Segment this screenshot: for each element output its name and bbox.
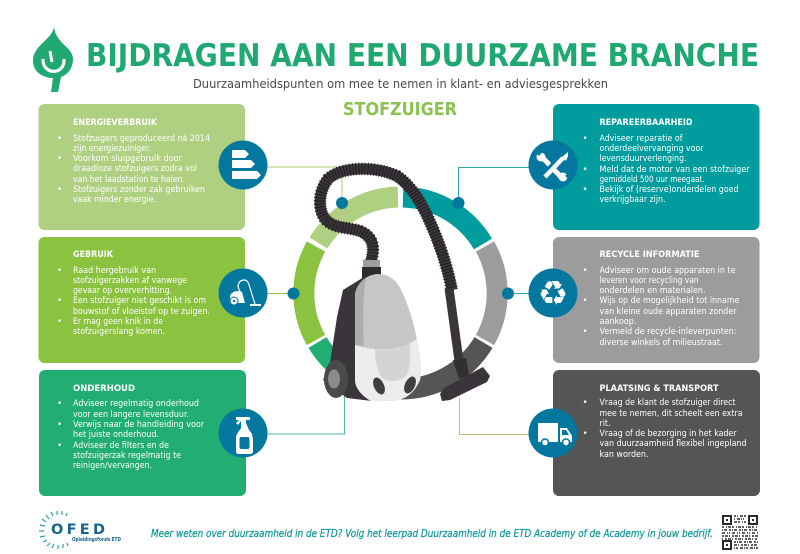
panel: repareerbaarheid: gemiddeld 500 uur meegaat. [600,175,704,185]
subtitle: Duurzaamheidspunten om mee te nemen in klant- en adviesgesprekken [193,77,608,92]
panel: recycle informatie: • [582,266,588,276]
panel: repareerbaarheid: Adviseer reparatie of [600,134,683,144]
panel: repareerbaarheid: REPAREERBAARHEID [600,118,692,128]
panel: energieverbruik: ENERGIEVERBRUIK [73,118,158,128]
panel: onderhoud: het juiste onderhoud. [73,430,159,440]
panel: gebruik: Een stofzuiger niet geschikt is om [73,296,206,306]
panel: onderhoud: Adviseer regelmatig onderhoud [73,399,199,409]
icon: leaf logo [33,27,73,92]
diagram: segmented ring [304,197,497,389]
icon: tools [528,140,578,190]
panel: recycle informatie: leveren voor recycling van [600,276,698,286]
panel: plaatsing en transport: mee te nemen, dit scheelt een extra [600,409,742,419]
logo: OFED: OFED [51,522,105,538]
panel: onderhoud [39,370,246,496]
panel: energieverbruik: Voorkom sluipgebruik door [73,154,182,164]
panel: repareerbaarheid [553,104,760,230]
panel: gebruik: stofzuigerslang komen. [73,327,165,337]
connector: onderhoud [262,396,344,434]
heading: stofzuiger: STOFZUIGER [343,100,457,120]
panel: energieverbruik: Stofzuigers geproduceerd ná 2014 [73,134,210,144]
panel: onderhoud: reinigen/vervangen. [73,461,152,471]
panel: gebruik: Er mag geen knik in de [73,317,163,327]
panel: energieverbruik: Stofzuigers zonder zak gebruiken [73,185,205,195]
panel: onderhoud: Verwijs naar de handleiding voor [73,420,204,430]
panel: onderhoud: voor een langere levensduur. [73,410,189,420]
icon: truck [528,408,578,458]
panel: recycle informatie: van kleine oude apparaten zonder [600,307,737,317]
panel: recycle informatie: Adviseer om oude apparaten in te [600,266,736,276]
panel: plaatsing en transport: van duurzaamheid flexibel ingepland [600,439,746,449]
icon: energy label [218,140,268,190]
panel: gebruik: GEBRUIK [73,250,114,260]
connector: plaatsing [460,398,535,434]
panel: plaatsing en transport: Vraag of de bezorging in het kader [600,429,737,439]
panel: recycle informatie: RECYCLE INFORMATIE [600,250,700,260]
logo: OFED: Opleidingsfonds ETD [72,537,122,543]
panel: energieverbruik [38,104,245,230]
footer call to action: Meer weten over duurzaamheid in de ETD? Volg het leerpad Duurzaamheid in de ETD Academy of de Academy in jouw bedrijf. [151,528,713,540]
panel: repareerbaarheid: • [582,185,588,195]
panel: energieverbruik: zijn energiezuiniger. [73,144,151,154]
connector: recycle [508,292,535,294]
panel: repareerbaarheid: onderdeelvervanging voor [600,144,704,154]
panel: plaatsing en transport: • [582,429,588,439]
panel: gebruik: stofzuigerzakken af vanwege [73,276,187,286]
panel: recycle informatie: aankoop. [600,317,636,327]
panel: repareerbaarheid: Bekijk of (reserve)onderdelen goed [600,185,738,195]
QR code [722,515,758,550]
panel: recycle informatie: Vermeld de recycle-inleverpunten: [600,327,736,337]
panel: onderhoud: ONDERHOUD [73,384,135,394]
panel: repareerbaarheid: • [582,165,588,175]
illustration: vacuum cleaner [320,169,490,401]
icon: vacuum [218,268,268,318]
icon: recycle: ♻ [538,274,568,314]
panel: plaatsing en transport: PLAATSING & TRANSPORT [600,384,719,394]
panel: gebruik: gevaar op oververhitting. [73,286,172,296]
connector: energieverbruik [262,167,342,203]
panel: energieverbruik: vaak minder energie. [73,195,156,205]
panel: plaatsing en transport [553,370,760,496]
panel: gebruik: • [57,317,62,327]
panel: energieverbruik: • [57,185,62,195]
ring dots [288,197,514,300]
panel: recycle informatie: onderdelen en materialen. [600,286,706,296]
panel: onderhoud: • [57,399,62,409]
panel: onderhoud: • [57,420,62,430]
panel: plaatsing en transport: rit. [600,419,610,429]
connector: repareerbaarheid [458,168,535,203]
panel: recycle informatie: Wijs op de mogelijkheid tot inname [600,296,740,306]
panel: energieverbruik: van het laadstation te halen. [73,175,185,185]
panel: recycle informatie: • [582,296,588,306]
panel: repareerbaarheid: • [582,134,588,144]
icon: recycle [528,268,578,318]
panel: repareerbaarheid: Meld dat de motor van een stofzuiger [600,165,750,175]
panel: plaatsing en transport: Vraag de klant de stofzuiger direct [600,398,736,408]
panel: plaatsing en transport: • [582,398,588,408]
connector: gebruik [262,292,293,294]
panel: plaatsing en transport: kan worden. [600,450,648,460]
panel: recycle informatie [553,237,760,363]
logo: OFED [39,511,122,549]
panel: energieverbruik: • [57,134,62,144]
panel: energieverbruik: draadloze stofzuigers zodra vol [73,164,197,174]
panel: recycle informatie: • [582,327,588,337]
panel: gebruik [38,237,245,363]
panel: repareerbaarheid: verkrijgbaar zijn. [600,195,666,205]
panel: gebruik: Raad hergebruik van [73,266,156,276]
panel: repareerbaarheid: levensduurverlenging. [600,154,686,164]
panel: onderhoud: • [57,441,62,451]
panel: onderhoud: stofzuigerzak regelmatig te [73,451,181,461]
panel: gebruik: • [57,296,62,306]
panel: gebruik: • [57,266,62,276]
panel: recycle informatie: diverse winkels of milieustraat. [600,338,722,348]
panel: onderhoud: Adviseer de filters en de [73,441,169,451]
panel: gebruik: bouwstof of vloeistof op te zuigen. [73,307,210,317]
icon: spray bottle [218,408,268,458]
panel: energieverbruik: • [57,154,62,164]
